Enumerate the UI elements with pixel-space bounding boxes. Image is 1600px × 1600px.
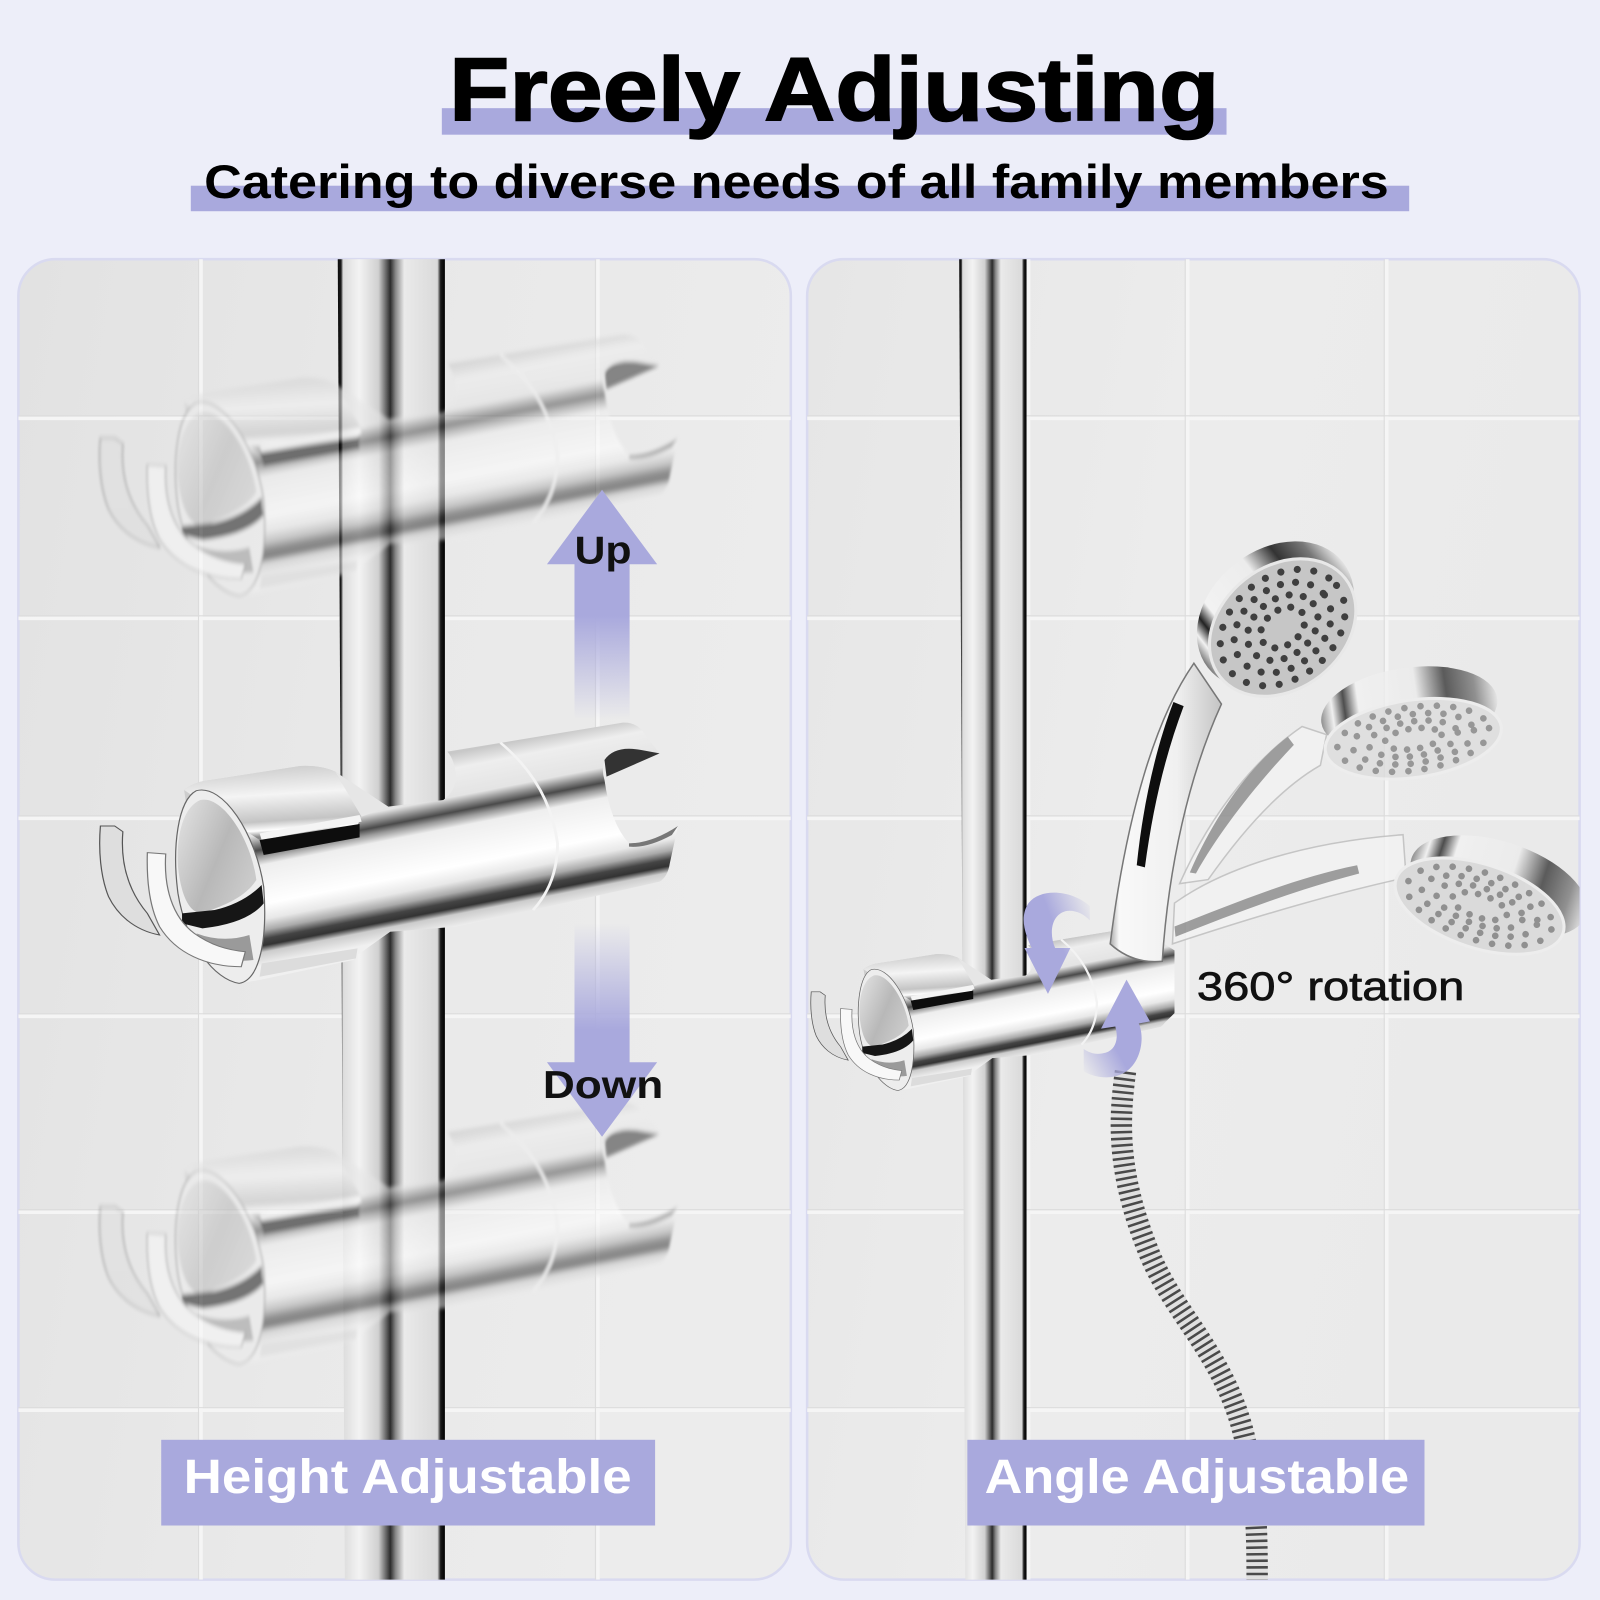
shower rod: [959, 259, 1027, 1584]
label: 360 rotation: 360° rotation: [1197, 965, 1464, 1009]
caption: angle adjustable: Angle Adjustable: [985, 1451, 1409, 1504]
chrome clamp: [100, 723, 678, 983]
caption: height adjustable: Height Adjustable: [184, 1451, 632, 1504]
label: down: Down: [543, 1064, 663, 1107]
shower head: lower translucent position: [1172, 834, 1580, 952]
shower head: main position: [1110, 511, 1389, 962]
subtitle: Catering to diverse needs of all family members: [204, 156, 1389, 208]
caption: angle adjustable: [967, 1440, 1424, 1526]
panel: angle adjustable: [807, 259, 1600, 1587]
label: up: Up: [574, 529, 632, 572]
ghost clamp: lower position: [100, 1103, 678, 1364]
hose: [1121, 1071, 1257, 1587]
shower rod: [338, 259, 445, 1584]
caption: height adjustable: [161, 1440, 655, 1526]
title: Freely Adjusting: [449, 40, 1219, 140]
arrow: down: [547, 923, 657, 1137]
panel: height adjustable: [18, 259, 791, 1584]
shower head: middle translucent position: [1180, 656, 1507, 884]
chrome clamp: [811, 927, 1174, 1091]
arrow: up: [547, 490, 657, 719]
ghost clamp: upper position: [100, 335, 678, 596]
rotation arrow: lower: [1084, 980, 1150, 1077]
rotation arrow: upper: [1024, 893, 1090, 994]
